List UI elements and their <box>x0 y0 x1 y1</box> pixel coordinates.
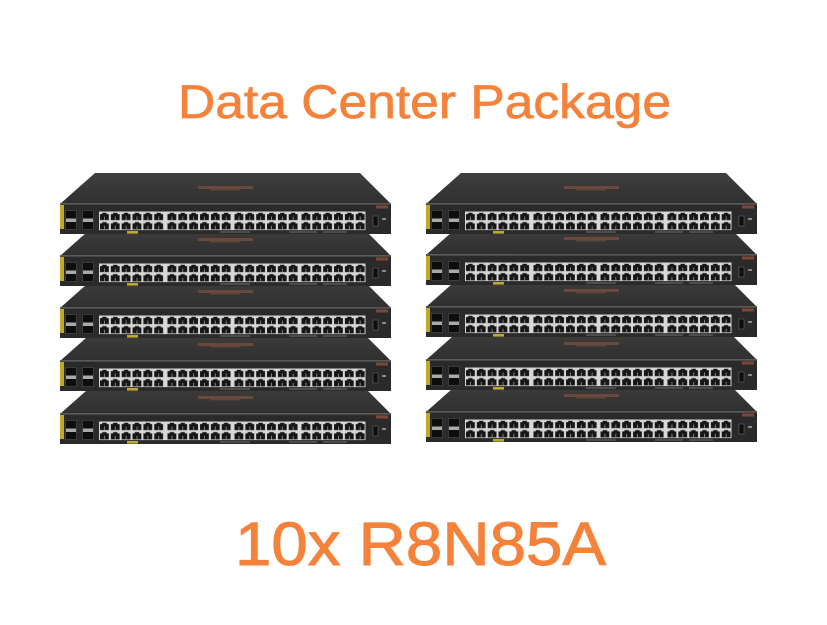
switch: right 5 <box>426 381 757 442</box>
right stack of five switches <box>426 173 757 442</box>
switch: right 4 <box>426 329 757 390</box>
switch: left 4 <box>60 330 391 391</box>
switch: left 1 <box>60 173 391 234</box>
switch: right 1 <box>426 173 757 234</box>
switch: left 2 <box>60 225 391 286</box>
title: Data Center Package <box>178 75 671 128</box>
left stack of five switches <box>60 173 391 444</box>
product quantity and model: 10x R8N85A <box>235 510 606 578</box>
switch: right 2 <box>426 224 757 285</box>
switch: left 5 <box>60 383 391 444</box>
switch: right 3 <box>426 276 757 337</box>
switch: left 3 <box>60 277 391 338</box>
